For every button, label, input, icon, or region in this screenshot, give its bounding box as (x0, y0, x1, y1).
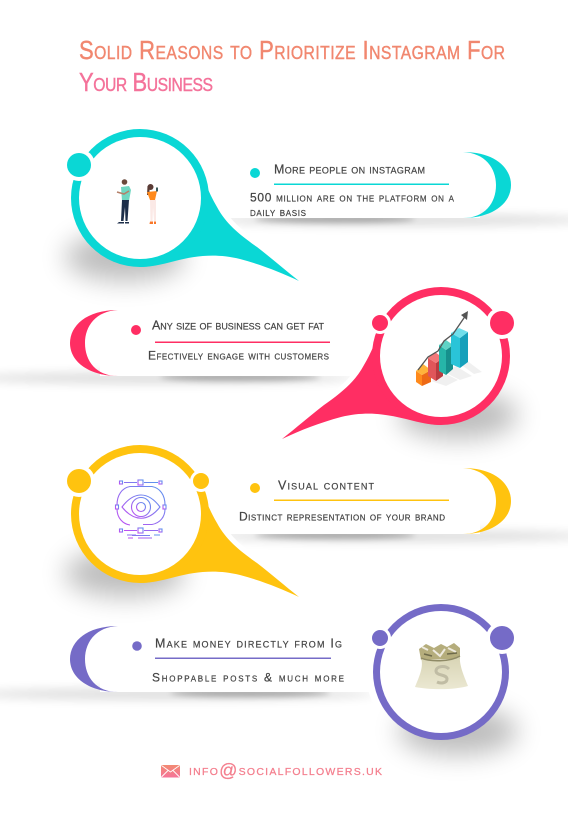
body text: Shoppable posts & much more (152, 670, 344, 684)
email address: @ (219, 760, 237, 780)
panel: more people on instagram (63, 129, 568, 281)
circle shadow (398, 707, 518, 755)
body text: Distinct representation of your brand (239, 510, 445, 524)
footer: email contact (161, 760, 382, 780)
crescent (463, 468, 511, 534)
pill (200, 468, 480, 534)
crescent (70, 626, 118, 692)
pill shadow (210, 214, 568, 226)
divider (155, 342, 330, 343)
icon: envelope (161, 765, 180, 778)
body text (250, 190, 455, 219)
circle shadow (65, 233, 185, 281)
status dot (131, 325, 141, 335)
body text: daily basis (250, 205, 306, 219)
heading: Any size of business can get fat (152, 318, 324, 332)
status dot (250, 483, 260, 493)
icon: growth bar chart with arrow (416, 311, 482, 386)
callout ring with tail (282, 287, 518, 439)
callout ring with tail (63, 129, 299, 281)
email address: INFO (189, 766, 218, 778)
body text: 500 million are on the platform on a (250, 190, 455, 204)
pill (100, 310, 380, 376)
crescent (70, 310, 118, 376)
panel: any size of business (0, 287, 518, 439)
status dot (132, 641, 142, 651)
panel: visual content (63, 445, 568, 597)
panel: make money directly (0, 597, 518, 755)
pill shadow (0, 372, 355, 384)
heading: Make money directly from Ig (155, 636, 342, 650)
pill (200, 152, 480, 218)
title: Solid Reasons to Prioritize Instagram For (79, 37, 505, 65)
status dot (250, 168, 260, 178)
divider (274, 184, 449, 185)
heading: Visual content (278, 478, 374, 492)
pill (100, 626, 380, 692)
callout ring (369, 604, 518, 740)
circle shadow (65, 549, 185, 597)
callout ring with tail (63, 445, 299, 597)
pill shadow (210, 530, 568, 542)
title (79, 37, 505, 97)
divider (155, 658, 331, 659)
heading: More people on instagram (274, 162, 425, 176)
title: Your Business (79, 69, 213, 97)
pill shadow (0, 688, 375, 700)
divider (274, 500, 449, 501)
email address: SOCIALFOLLOWERS.UK (239, 766, 382, 778)
circle shadow (398, 391, 518, 439)
crescent (463, 152, 511, 218)
icon: two people with phones (117, 179, 158, 224)
icon: eye with vector handles (116, 480, 166, 538)
body text: Efectively engage with customers (148, 348, 329, 362)
icon: bag of money (415, 643, 468, 689)
